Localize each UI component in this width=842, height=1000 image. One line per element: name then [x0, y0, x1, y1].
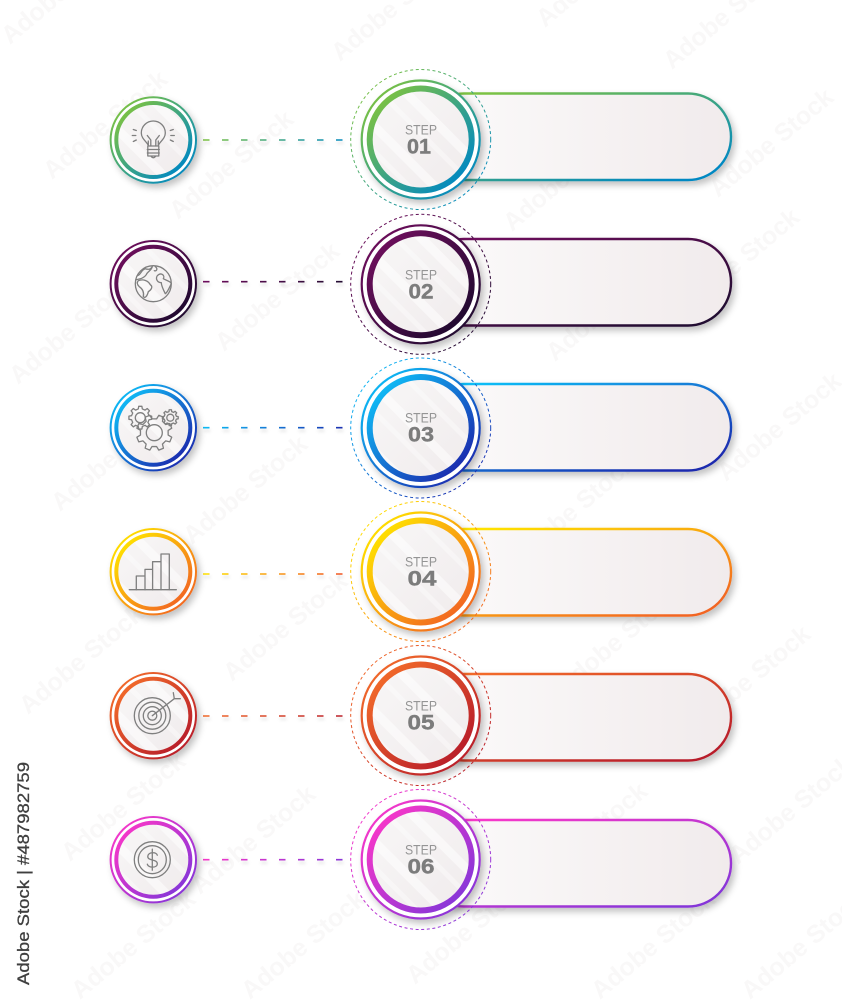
step 03 row: [111, 358, 731, 498]
step 03 number badge: [351, 358, 491, 498]
step 05 connector: [203, 715, 350, 717]
step 05 row: [111, 646, 731, 786]
step 03 icon badge: [111, 385, 196, 470]
watermark pattern: Adobe Stock: [551, 580, 686, 700]
step 04 bar: [421, 529, 731, 616]
step 02 row: [111, 214, 731, 354]
watermark pattern: Adobe Stock: [541, 247, 676, 367]
step 06 number badge: [351, 790, 491, 930]
step 04 number badge: [351, 502, 491, 642]
step 05 label: STEP: [405, 699, 437, 714]
step 04 number: 04: [408, 568, 437, 591]
step 05 bar: [421, 674, 731, 760]
step 04 connector: [203, 573, 350, 575]
step 02 number: 02: [408, 280, 434, 303]
step 06 row: [111, 790, 731, 930]
step 02 connector: [203, 281, 350, 283]
step 05 number badge: [351, 646, 491, 786]
step 02 label: STEP: [405, 267, 437, 282]
step 03 connector: [203, 427, 350, 429]
step 01 label: STEP: [405, 123, 437, 138]
watermark pattern: Adobe Stock: [178, 430, 313, 550]
step 03 label: STEP: [405, 411, 437, 426]
watermark pattern: Adobe Stock: [498, 117, 633, 237]
step 05 number: 05: [408, 711, 435, 734]
step 03 number: 03: [408, 424, 434, 447]
watermark pattern: Adobe Stock: [518, 777, 653, 897]
step 01 row: [111, 70, 731, 210]
icon: globe: [135, 266, 171, 302]
icon: target with arrow: [134, 693, 180, 734]
step 06 bar: [421, 820, 731, 906]
step 06 icon badge: [111, 817, 196, 902]
watermark pattern: Adobe Stock: [38, 65, 173, 185]
icon: bar chart: [129, 554, 176, 590]
step 03 bar: [421, 384, 731, 470]
step 01 number: 01: [407, 135, 431, 158]
icon: dollar coin: [134, 842, 170, 878]
watermark pattern: Adobe Stock: [218, 567, 353, 687]
watermark pattern: Adobe Stock: [670, 203, 805, 323]
step 02 bar: [421, 239, 731, 326]
step 02 icon badge: [111, 241, 196, 326]
watermark pattern: Adobe Stock: [14, 600, 149, 720]
watermark pattern: Adobe Stock: [704, 83, 839, 203]
step 06 connector: [203, 859, 350, 861]
step 04 row: [111, 502, 731, 642]
step 01 number badge: [351, 70, 491, 210]
step 05 icon badge: [111, 673, 196, 758]
step 06 label: STEP: [405, 843, 437, 858]
step 02 number badge: [351, 214, 491, 354]
step 04 icon badge: [111, 529, 196, 614]
watermark pattern: Adobe Stock: [56, 747, 191, 867]
icon: light bulb: [132, 121, 174, 158]
step 01 icon badge: [111, 97, 196, 183]
watermark pattern: Adobe Stock: [506, 450, 641, 570]
watermark pattern: Adobe Stock: [186, 780, 321, 900]
watermark pattern: Adobe Stock: [681, 620, 816, 740]
watermark pattern: Adobe Stock: [401, 870, 536, 990]
watermark pattern: Adobe Stock: [210, 237, 345, 357]
step 01 bar: [421, 94, 731, 180]
watermark pattern: Adobe Stock: [4, 270, 139, 390]
icon: gears: [129, 406, 178, 456]
step 06 number: 06: [408, 855, 434, 878]
watermark pattern: Adobe Stock: [46, 397, 181, 517]
step 01 connector: [203, 139, 350, 141]
step 04 label: STEP: [405, 555, 437, 570]
watermark pattern: Adobe Stock: [164, 105, 299, 225]
stock credit text: Adobe Stock | #487982759: [14, 762, 33, 985]
